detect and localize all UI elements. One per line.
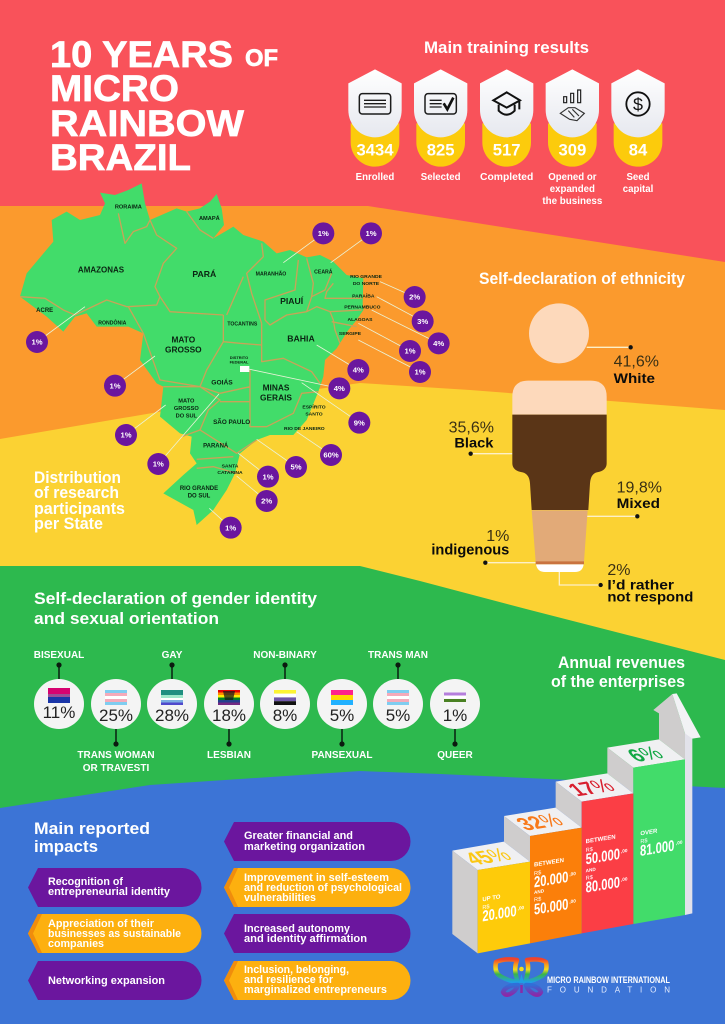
card: seed capital [611,69,665,195]
step: between 20.000 and 50.000: R$ [534,870,542,877]
segment: black [512,415,607,510]
map: percentage badges: 5% [290,463,302,472]
card: enrolled: Enrolled [356,172,394,183]
step: between 20.000 and 50.000: ,00 [569,871,576,877]
item: non-binary: 8% [273,706,297,725]
card: enrolled: 3434 [356,140,394,159]
label: mixed [617,480,662,511]
item: trans woman or travesti [77,679,155,774]
card: opened or expanded the business: expanded [550,184,595,195]
map: percentage badges: 4% [334,384,345,393]
heading: gender identity and sexual orientation [34,589,318,628]
map: state names: RIO DE JANEIRO [284,426,325,432]
segment: white [529,303,589,363]
pill: appreciation of businesses: Appreciation of their [48,918,155,930]
card: completed [480,69,533,183]
map: percentage badges: 4% [433,339,444,348]
card: completed: Completed [480,172,533,183]
map: state names: PARANÁ [203,442,229,449]
map: percentage badges: 1% [120,431,132,440]
map: state names: RONDÔNIA [98,318,127,326]
step: between 50.000 and 80.000: ,00 [621,848,628,854]
pill: financial and marketing organization [224,822,411,861]
title: 10 YEARS [50,33,233,75]
card: seed capital: capital [623,184,653,195]
step: up to 20.000 [452,842,530,953]
map: state names: BAHIA [287,333,315,343]
label: white [614,354,659,386]
card: seed capital: $ [633,95,643,115]
step: between 20.000 and 50.000: AND [534,888,545,895]
map: state names: GROSSO [165,344,202,354]
text: organisation name: MICRO RAINBOW INTERNATIONAL [547,975,670,986]
icon: butterfly [496,959,546,995]
item: trans woman or travesti: OR TRAVESTI [83,763,149,774]
pill: recognition of entrepreneurial identity: Recognition of [48,876,123,888]
map: Brazil states with percentages [20,183,450,539]
heading: self-declaration of ethnicity: Self-declaration of ethnicity [479,269,685,288]
map: state names: ESPÍRITO [302,402,326,410]
map: percentage badges: 1% [262,472,274,481]
item: lesbian: 18% [212,706,246,725]
card: selected: Selected [421,172,461,183]
map: state names: RORAIMA [115,205,142,211]
step: between 50.000 and 80.000 [556,773,633,933]
label: white: 41,6% [614,354,659,371]
map: percentage badges: 1% [365,229,377,238]
title: MICRO [50,67,179,109]
heading: distribution of research participants: participants [34,500,125,518]
card: enrolled [348,69,402,183]
heading: main reported impacts [34,819,150,856]
item: gay: GAY [162,650,183,661]
pill: recognition of entrepreneurial identity: entrepreneurial identity [48,886,171,898]
step: up to 20.000: 20.000 [482,903,517,925]
segment: mixed [532,510,588,562]
map: state names: SERGIPE [339,331,362,337]
step: over 81.000: OVER [640,829,658,837]
step: between 20.000 and 50.000: R$ [534,896,542,904]
label: indigenous [431,528,509,559]
map: percentage badges: 1% [404,347,416,356]
step: between 20.000 and 50.000: ,00 [569,898,576,904]
map: state borders [20,212,362,473]
title [50,33,278,178]
item: bisexual [34,650,84,729]
item: pansexual [312,679,372,761]
step: up to 20.000: ,00 [518,905,525,911]
map: percentage badges: 2% [409,293,420,302]
label: no response: I’d rather [607,577,675,593]
item: trans woman or travesti: 25% [99,706,133,725]
map: state names: ACRE [36,308,53,314]
panel: reported impacts list [28,822,411,1000]
pill: networking expansion: Networking expansion [48,975,165,987]
item: pansexual: PANSEXUAL [312,750,372,761]
pill: appreciation of businesses: businesses as sustainable [48,928,181,940]
map: state names: PIAUÍ [280,296,304,306]
heading: distribution of research participants: Distribution [34,469,121,487]
item: gay: 28% [155,706,189,725]
label: indigenous: 1% [486,528,509,545]
map: state names: MATO [178,398,195,404]
card: selected [414,69,467,183]
map: state names: MARANHÃO [256,271,286,278]
item: trans woman or travesti: TRANS WOMAN [77,750,155,761]
heading: annual revenues: of the enterprises [551,672,685,691]
heading: main reported impacts: impacts [34,837,98,856]
pill: self-esteem: and reduction of psychological [244,882,402,894]
map: percentage badges: 3% [417,317,428,326]
map: state names: PARAÍBA [352,292,375,300]
map: state names: GROSSO [174,406,199,412]
heading: main reported impacts: Main reported [34,819,150,838]
pill: inclusion, belonging and resilience [224,961,411,1000]
card: opened or expanded the business: 309 [558,140,586,159]
item: trans man: 5% [386,706,410,725]
step: between 20.000 and 50.000: BETWEEN [534,858,564,869]
step: between 50.000 and 80.000: ,00 [621,876,628,882]
card: seed capital: 84 [629,140,648,159]
map: percentage badges: 1% [109,381,121,390]
segment: indigenous [536,561,584,564]
card: opened or expanded the business [542,69,602,207]
title: RAINBOW [50,102,245,144]
pill: autonomy and identity affirmation [224,914,411,953]
map: Distrito Federal marker [240,366,249,372]
chart: annual revenue staircase [452,693,701,953]
map: state names: AMAPÁ [199,215,220,222]
map: percentage badges: 60% [323,451,339,460]
pill: financial and marketing organization: Greater financial and [244,830,353,842]
map: state names: DO SUL [188,493,211,499]
card: opened or expanded the business: Opened or [548,172,597,183]
map: state names: GOIÁS [211,378,233,387]
map: state names: TOCANTINS [227,322,258,328]
map: state names: RIO GRANDE [180,486,218,492]
map: percentage badges: 2% [261,497,272,506]
step: up to 20.000: R$ [482,904,490,911]
map: state names: SANTA [222,463,239,469]
item: lesbian [204,679,254,761]
step: between 20.000 and 50.000: 32% [510,809,569,835]
label: no response: 2% [607,562,630,579]
pill: inclusion, belonging and resilience: marginalized entrepreneurs [244,984,387,996]
map: percentage badges: 1% [414,368,426,377]
pill: appreciation of businesses: companies [48,938,104,950]
card: completed: 517 [493,140,521,159]
map: state names: ALAGOAS [348,317,373,323]
map: state names: SÃO PAULO [213,417,250,426]
segment: no response [536,564,584,572]
heading: distribution of research participants [34,469,125,533]
item: queer [430,679,480,761]
step: between 20.000 and 50.000: 50.000 [534,896,568,919]
item: lesbian: LESBIAN [207,750,251,761]
item: bisexual: BISEXUAL [34,650,84,661]
step: over 81.000 [607,739,685,924]
step: over 81.000: 81.000 [640,838,674,860]
map: country shape [20,183,363,525]
step: between 20.000 and 50.000: 20.000 [534,869,568,891]
step: between 50.000 and 80.000: BETWEEN [586,835,616,845]
map: state names: GERAIS [260,392,292,402]
step: over 81.000: R$ [640,838,648,845]
leader lines [471,347,637,585]
card: opened or expanded the business: the business [542,196,602,207]
step: up to 20.000: 45% [459,844,517,869]
step: between 50.000 and 80.000: 80.000 [586,874,620,897]
map: state names: CATARINA [217,470,243,476]
map: state names: AMAZONAS [78,266,125,275]
item: trans man: TRANS MAN [368,650,428,661]
panel: training results cards [348,69,665,207]
map: percentage badges: 1% [225,523,236,532]
map: percentage badges: 4% [353,366,364,375]
title: OF [245,45,278,72]
item: queer: QUEER [437,750,474,761]
label: black [449,420,494,450]
heading: distribution of research participants: per State [34,515,103,533]
step: between 50.000 and 80.000: R$ [586,875,594,882]
label: mixed: Mixed [617,495,660,511]
text: foundation: FOUNDATION [547,986,670,994]
map: state names: FEDERAL [230,360,249,365]
title: BRAZIL [50,136,191,178]
label: no response [607,562,693,605]
arrow [653,693,701,915]
connectors [59,665,455,744]
map: percentage badges: 9% [354,418,365,427]
pill: appreciation of businesses [28,914,202,953]
pill: self-esteem: vulnerabilities [244,892,316,904]
pill: inclusion, belonging and resilience: and resilience for [244,974,334,986]
card: seed capital: Seed [626,172,650,183]
map: state names: DO SUL [176,414,198,420]
map: percentage badges: 1% [318,229,329,238]
step: between 20.000 and 50.000 [504,808,582,943]
pill: self-esteem [224,868,411,907]
step: between 50.000 and 80.000: 17% [562,775,620,800]
label: black: Black [454,434,494,450]
item: pansexual: 5% [330,706,354,725]
item: non-binary: NON-BINARY [253,650,317,661]
map: percentage badges: 1% [31,338,43,347]
pill: financial and marketing organization: marketing organization [244,841,365,853]
map: state names: MINAS [263,382,290,392]
label: mixed: 19,8% [617,480,662,497]
logo: Micro Rainbow International Foundation [496,959,670,995]
step: between 50.000 and 80.000: 50.000 [586,846,620,868]
pill: networking expansion [28,961,202,1000]
map: state names: CEARÁ [314,269,333,276]
label: no response: not respond [607,589,693,605]
pill: recognition of entrepreneurial identity [28,868,202,907]
item: queer: 1% [443,706,467,725]
heading: annual revenues: Annual revenues [558,653,685,672]
pill: autonomy and identity affirmation: Increased autonomy [244,923,351,935]
map: state names: MATO [171,334,196,344]
pill: inclusion, belonging and resilience: Inclusion, belonging, [244,964,349,976]
heading: gender identity and sexual orientation: Self-declaration of gender identity [34,589,318,608]
heading: distribution of research participants: of research [34,484,119,502]
map: leader lines [37,233,439,528]
map: state names: DO NORTE [353,281,380,287]
chart: ethnicity person pictogram [431,303,693,605]
label: white: White [614,370,655,386]
step: between 50.000 and 80.000: AND [586,867,596,873]
heading: annual revenues [551,653,685,691]
pill: self-esteem: Improvement in self-esteem [244,872,389,884]
heading: main training results: Main training results [424,38,589,57]
pill: autonomy and identity affirmation: and identity affirmation [244,933,367,945]
map: percentage badges [26,222,450,539]
map: state names: PARÁ [192,269,217,279]
item: non-binary [253,650,317,729]
heading: gender identity and sexual orientation: and sexual orientation [34,609,219,628]
map: state names: DISTRITO [230,355,248,360]
map: percentage badges: 1% [153,460,164,469]
label: indigenous: indigenous [431,543,509,559]
map: state names [36,205,383,499]
step: up to 20.000: UP TO [482,894,501,903]
map: state names: PERNAMBUCO [344,305,381,311]
item: bisexual: 11% [43,703,75,722]
map: state names: RIO GRANDE [350,274,383,280]
item: gay [147,650,197,729]
item: trans man [368,650,428,729]
map: state names: SANTO [305,411,323,417]
step: over 81.000: ,00 [676,840,683,846]
chart: gender identity flags [34,650,480,774]
step: between 50.000 and 80.000: R$ [586,847,594,854]
label: black: 35,6% [449,420,494,437]
step: over 81.000: 6% [621,742,669,766]
card: selected: 825 [427,140,455,159]
